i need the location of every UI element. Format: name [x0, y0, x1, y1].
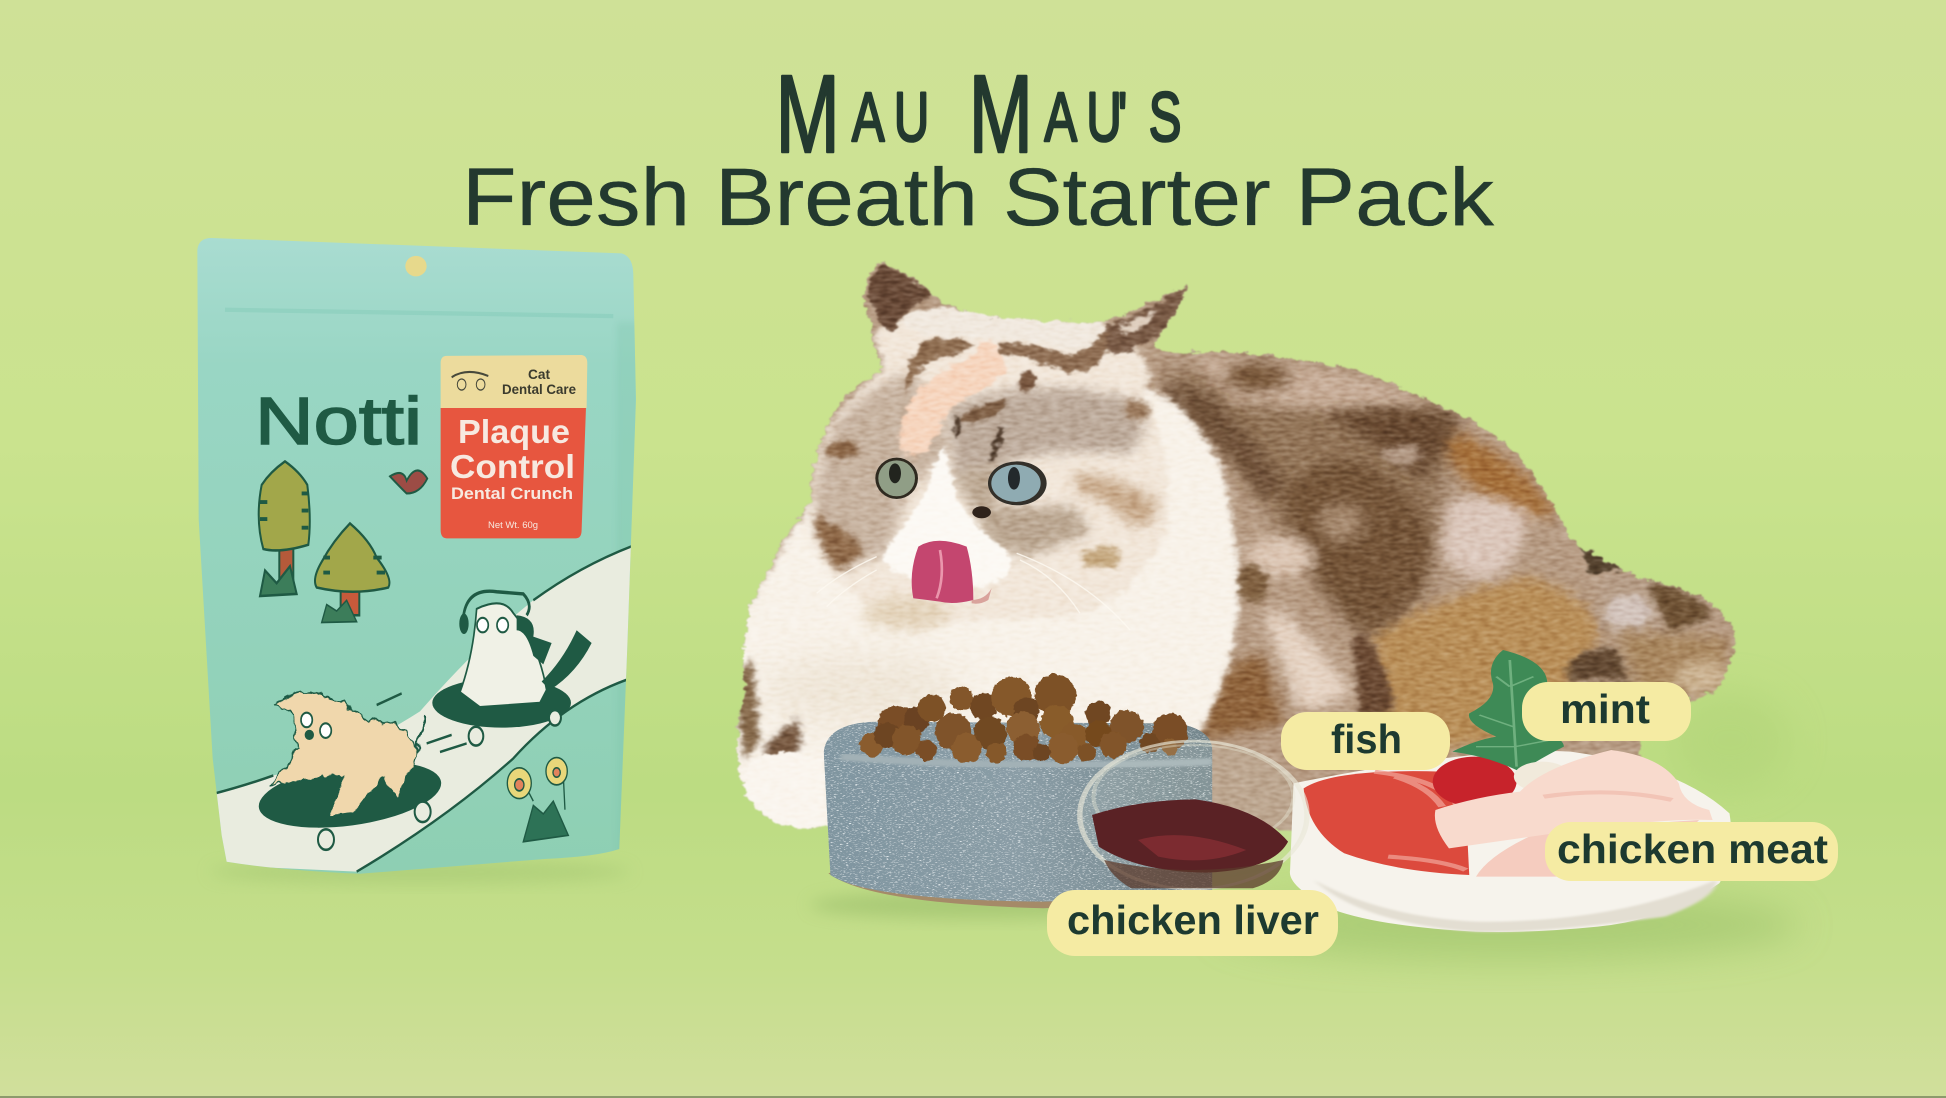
- bag text: Cat Dental Care: [502, 366, 576, 397]
- label: chicken meat: [1545, 822, 1838, 881]
- bag shape and illustrations: [197, 238, 640, 878]
- bag text: Plaque Control Dental Crunch: Net Wt. 60g: [488, 520, 538, 530]
- illustration: dog on skateboard: [256, 691, 467, 850]
- head cream cheek markings: [1073, 473, 1157, 527]
- bag text: Notti: Notti: [255, 384, 422, 459]
- cat: [734, 261, 1736, 832]
- chicken meat: [1476, 820, 1699, 877]
- food bowl: [824, 722, 1212, 908]
- illustration: cat on skateboard: [432, 591, 592, 746]
- label: mint: mint: [1560, 686, 1650, 732]
- bag text: Cat Dental Care: Dental Care: [502, 381, 576, 397]
- plate of raw ingredients: [1290, 650, 1731, 932]
- label: fish: [1281, 712, 1450, 770]
- cat ears: [869, 264, 931, 332]
- title: [462, 54, 1495, 243]
- bag text: Plaque Control Dental Crunch: Dental Crunch: [451, 484, 573, 503]
- plate: [1290, 751, 1731, 932]
- cat nose: [972, 506, 991, 518]
- title line: Mau Mau's: M: [969, 54, 1033, 176]
- illustration: flowers and grass: [507, 758, 568, 842]
- head base: [811, 309, 1168, 623]
- cat paw: [744, 750, 804, 829]
- white road: [210, 546, 633, 872]
- cat right eye: [988, 461, 1047, 505]
- cat forehead blaze: [900, 340, 1007, 456]
- cat left eye: [875, 458, 918, 499]
- kibble: [860, 674, 1188, 763]
- cat shoulder and flank marks: [733, 660, 760, 760]
- liver: [1092, 799, 1288, 873]
- cat body base: [762, 261, 1736, 832]
- head brown markings: [815, 513, 863, 570]
- red ingredient: [1433, 757, 1517, 807]
- bowl base: [828, 870, 1118, 908]
- label mascot: [452, 372, 488, 390]
- bag text: Cat Dental Care: Cat: [528, 366, 550, 382]
- illustration: butterfly: [390, 470, 427, 493]
- cat tongue: [912, 541, 973, 603]
- title line: Mau Mau's: M: [776, 54, 840, 176]
- bag hang hole: [405, 256, 427, 276]
- cat white chest: [730, 388, 1238, 840]
- label: fish: fish: [1331, 716, 1402, 762]
- head top white: [900, 307, 1102, 350]
- title line: Mau Mau's: AU: [852, 77, 929, 156]
- illustration: trees: [259, 461, 389, 623]
- label: chicken liver: [1047, 890, 1338, 956]
- label: chicken liver: chicken liver: [1067, 897, 1319, 943]
- label: chicken meat: chicken meat: [1557, 826, 1828, 872]
- cat forehead stripes: [957, 417, 1003, 463]
- title line: Mau Mau's: AU'S: [1044, 77, 1181, 156]
- cat body fur patches: [1161, 356, 1732, 757]
- glass base: [1104, 860, 1283, 888]
- label background: [441, 355, 587, 408]
- cat head: [811, 264, 1187, 630]
- title line: Fresh Breath Starter Pack: Fresh Breath Starter Pack: [462, 152, 1495, 243]
- bowl body: [824, 722, 1212, 902]
- label: mint: [1522, 682, 1691, 741]
- cat muzzle white: [880, 447, 1010, 593]
- fish: [1304, 771, 1469, 875]
- glass dish of chicken liver: [1080, 741, 1307, 889]
- mint leaves: [1452, 650, 1564, 772]
- cat whiskers: [817, 553, 1130, 630]
- white ingredient: [1514, 762, 1571, 792]
- bag text: Plaque Control Dental Crunch: Plaque: [458, 413, 570, 450]
- product bag: Notti Plaque Control: [197, 238, 640, 878]
- floor shadows: [210, 690, 1800, 959]
- bag text: Plaque Control Dental Crunch: [450, 413, 575, 530]
- bag text: Plaque Control Dental Crunch: Control: [450, 448, 575, 485]
